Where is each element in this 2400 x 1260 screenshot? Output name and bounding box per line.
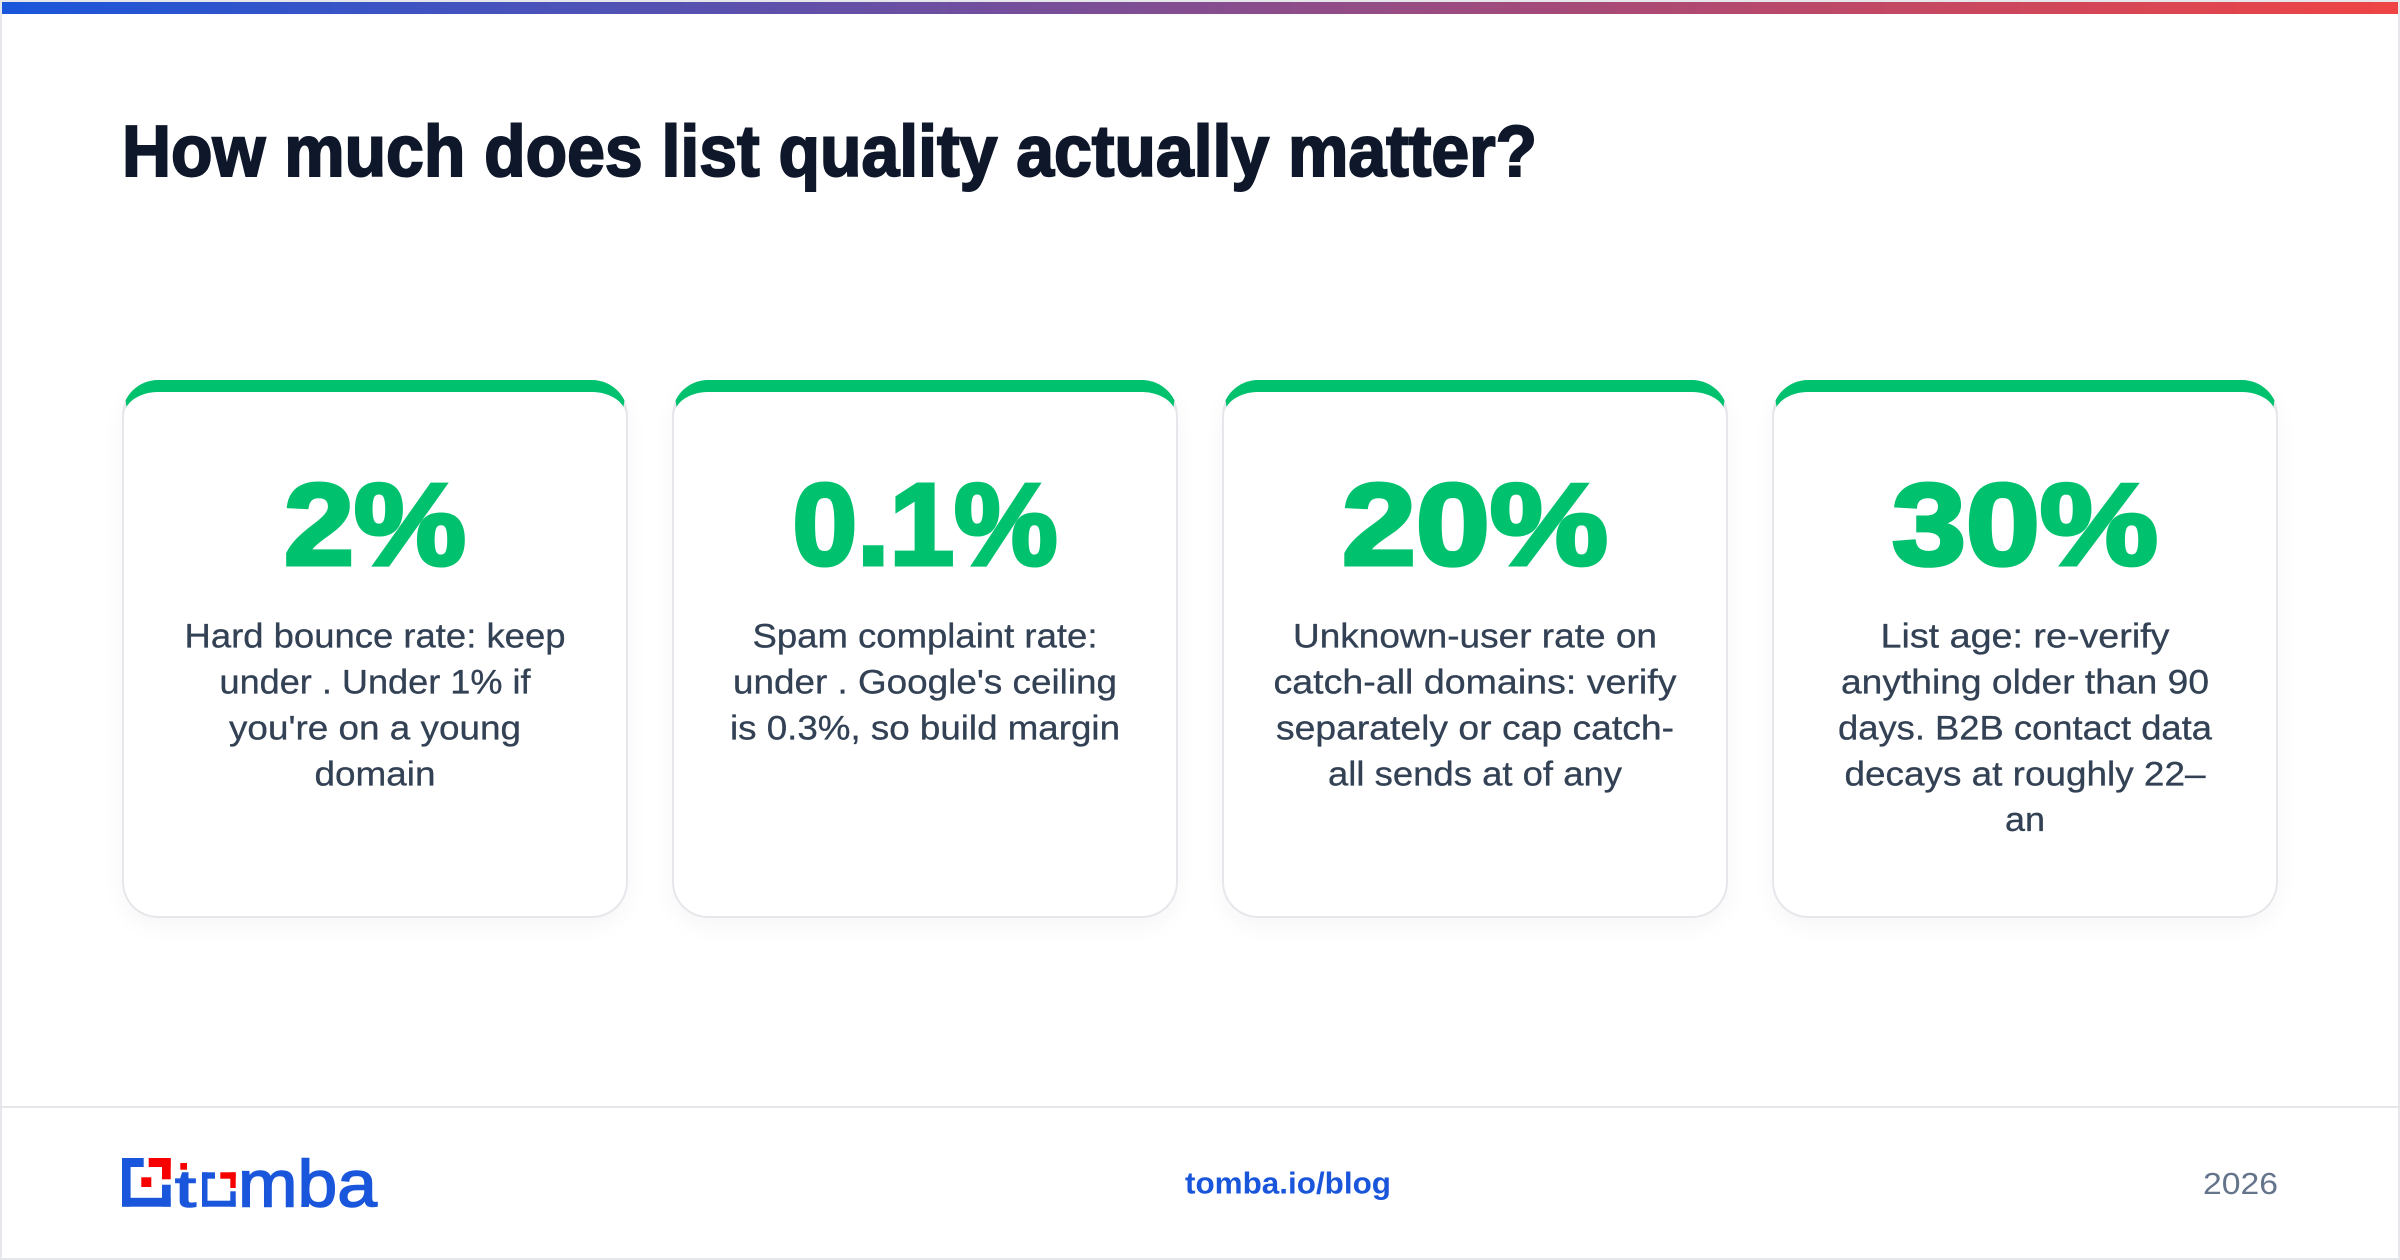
icon: logo mark: [122, 1158, 171, 1207]
footer link: tomba.io/blog: [1185, 1165, 1391, 1200]
description: hard bounce rate: under . Under 1% if: [220, 664, 531, 702]
description: spam complaint rate: [730, 618, 1120, 748]
panel: unknown-user rate card: [1222, 380, 1728, 918]
stat: 0.1%: 0.1%: [792, 460, 1058, 590]
title: How much does list quality actually matter?: [122, 112, 1537, 192]
panel: hard bounce rate card: [122, 380, 628, 918]
description: hard bounce rate: [184, 618, 566, 794]
stat: 2%: 2%: [284, 460, 466, 590]
stat: 30%: 30%: [1892, 460, 2158, 590]
description: list age: anything older than 90: [1841, 664, 2209, 702]
logo letters mba: mba: [238, 1147, 377, 1221]
description: spam complaint rate: under . Google's ceiling: [733, 664, 1117, 702]
top gradient bar: [2, 2, 2398, 14]
stat: 20%: 20%: [1342, 460, 1608, 590]
description: hard bounce rate: Hard bounce rate: keep: [184, 618, 566, 656]
description: spam complaint rate: Spam complaint rate:: [752, 618, 1098, 656]
footer divider: [2, 1106, 2398, 1108]
icon: t dot: [180, 1163, 187, 1170]
description: unknown-user rate: separately or cap catch-: [1276, 710, 1674, 748]
description: unknown-user rate: [1274, 618, 1676, 794]
description: unknown-user rate: catch-all domains: verify: [1274, 664, 1676, 702]
description: list age: decays at roughly 22–: [1844, 756, 2206, 794]
description: spam complaint rate: is 0.3%, so build margin: [730, 710, 1120, 748]
panel: list age card: [1772, 380, 2278, 918]
description: hard bounce rate: domain: [314, 756, 436, 794]
description: hard bounce rate: you're on a young: [229, 710, 521, 748]
description: unknown-user rate: all sends at of any: [1328, 756, 1622, 794]
logo letter t: t: [175, 1161, 197, 1219]
logo: tomba: [122, 1147, 377, 1221]
description: list age: [1838, 618, 2212, 839]
icon: square letter o: [202, 1172, 236, 1207]
footer year: 2026: [2203, 1166, 2278, 1201]
description: unknown-user rate: Unknown-user rate on: [1293, 618, 1657, 656]
panel: spam complaint rate card: [672, 380, 1178, 918]
description: list age: List age: re-verify: [1880, 618, 2170, 656]
description: list age: an: [2005, 801, 2045, 839]
description: list age: days. B2B contact data: [1838, 710, 2212, 748]
footer: [122, 1147, 2278, 1221]
